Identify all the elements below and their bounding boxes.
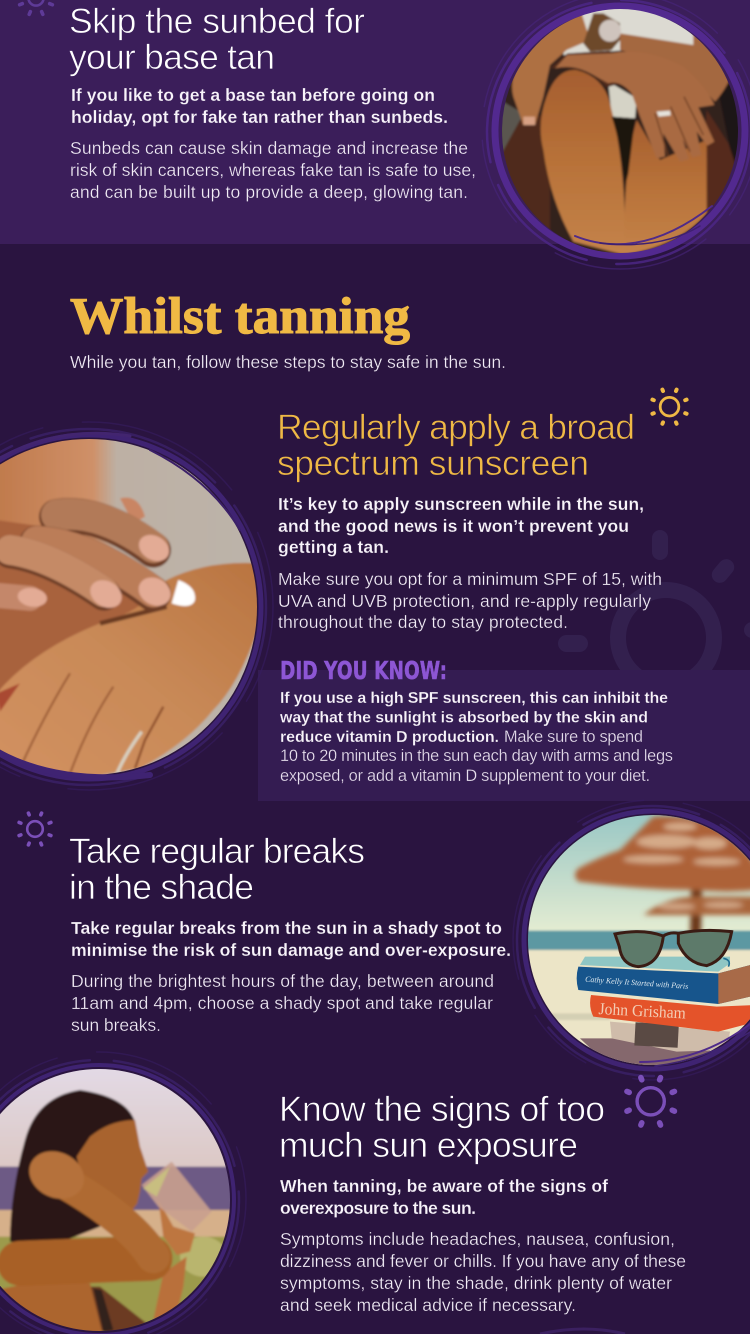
text: breaks body: sun breaks.: [71, 1015, 161, 1035]
text: sunscreen body: throughout the day to stay protected.: [278, 612, 568, 632]
icon: sun top left: [17, 0, 55, 17]
text: did you know body: If you use a high SPF sunscreen, this can inhibit the: [280, 690, 668, 707]
text: signs lead: When tanning, be aware of the signs of: [280, 1176, 608, 1196]
heading: signs of sun exposure: [279, 1089, 605, 1165]
icon: purple sun right: [623, 1074, 678, 1129]
heading: skip the sunbed: Skip the sunbed for: [69, 1, 365, 41]
text: sunscreen lead: getting a tan.: [278, 537, 389, 557]
text: sunbed body: and can be built up to provide a deep, glowing tan.: [70, 182, 468, 202]
photo: applying sunscreen to hand with brush ring: [0, 410, 273, 790]
text: did you know body: exposed, or add a vitamin D supplement to your diet.: [280, 767, 650, 785]
heading: regular breaks: Take regular breaks: [69, 831, 365, 871]
text: breaks lead: Take regular breaks from the sun in a shady spot to: [71, 918, 502, 938]
text: breaks lead: minimise the risk of sun damage and over-exposure.: [71, 940, 511, 960]
text: signs body: dizziness and fever or chills. If you have any of these: [280, 1251, 686, 1271]
text: sunbed lead: If you like to get a base tan before going on: [71, 85, 435, 105]
text: sunbed body: risk of skin cancers, whereas fake tan is safe to use,: [70, 160, 476, 180]
heading: signs of sun exposure: much sun exposure: [279, 1125, 578, 1165]
text: breaks lead: [71, 918, 511, 960]
text: signs body: and seek medical advice if necessary.: [280, 1295, 576, 1315]
icon: purple sun left: [17, 811, 53, 847]
heading: whilst tanning: Whilst tanning: [70, 288, 410, 345]
text: did you know body: reduce vitamin D production.: [280, 729, 499, 746]
heading: regularly apply sunscreen: Regularly apply a broad: [277, 407, 635, 447]
heading: regularly apply sunscreen: [277, 407, 635, 483]
panel: skip the sunbed: [0, 0, 750, 244]
heading: signs of sun exposure: Know the signs of too: [279, 1089, 605, 1129]
text: signs lead: overexposure to the sun.: [280, 1198, 476, 1218]
text: did you know body: [279, 690, 673, 785]
text: whilst tanning intro: While you tan, follow these steps to stay safe in the sun.: [70, 352, 506, 372]
text: did you know body: way that the sunlight is absorbed by the skin and: [279, 710, 648, 726]
text: sunscreen body: UVA and UVB protection, and re-apply regularly: [278, 591, 651, 611]
heading: regularly apply sunscreen: spectrum sunscreen: [277, 443, 589, 483]
text: sunbed lead: holiday, opt for fake tan rather than sunbeds.: [71, 107, 448, 127]
text: did you know body: Make sure to spend: [504, 728, 643, 746]
panel: did you know: [258, 670, 750, 801]
photo: woman drinking water with brush ring: [0, 1052, 247, 1334]
text: signs lead: [280, 1176, 608, 1218]
text: signs body: symptoms, stay in the shade, drink plenty of water: [280, 1273, 672, 1293]
text: signs body: [280, 1229, 686, 1315]
icon: faint background sun: [558, 530, 750, 670]
photo: sunglasses on books at the beach with brush ring: Cathy Kelly It Started with Paris: [585, 975, 689, 991]
text: breaks body: During the brightest hours of the day, between around: [71, 971, 494, 991]
brush arc bottom right: [540, 1329, 625, 1334]
text: sunbed body: Sunbeds can cause skin damage and increase the: [70, 138, 468, 158]
text: sunscreen lead: and the good news is it won’t prevent you: [278, 516, 629, 536]
heading: skip the sunbed: your base tan: [69, 37, 275, 77]
text: sunbed body: [70, 138, 476, 202]
photo: sunglasses on books at the beach with brush ring: [513, 800, 750, 1080]
text: did you know body: 10 to 20 minutes in the sun each day with arms and legs: [280, 747, 673, 765]
text: sunscreen lead: [278, 494, 644, 557]
heading: regular breaks: [69, 831, 365, 907]
text: sunscreen lead: It’s key to apply sunscreen while in the sun,: [278, 494, 644, 514]
text: signs body: Symptoms include headaches, nausea, confusion,: [280, 1229, 675, 1249]
text: sunscreen body: Make sure you opt for a minimum SPF of 15, with: [278, 569, 662, 589]
text: sunscreen body: [278, 569, 662, 632]
heading: skip the sunbed: [69, 1, 365, 77]
photo: tanned knees with brush ring: [480, 0, 750, 269]
heading: did you know: DID YOU KNOW:: [280, 656, 447, 685]
text: breaks body: 11am and 4pm, choose a shady spot and take regular: [71, 993, 493, 1013]
text: sunbed lead: [71, 85, 448, 127]
icon: gold sun: [650, 387, 689, 426]
text: breaks body: [71, 971, 494, 1035]
heading: regular breaks: in the shade: [69, 867, 254, 907]
photo: sunglasses on books at the beach with brush ring: John Grisham: [598, 999, 686, 1023]
